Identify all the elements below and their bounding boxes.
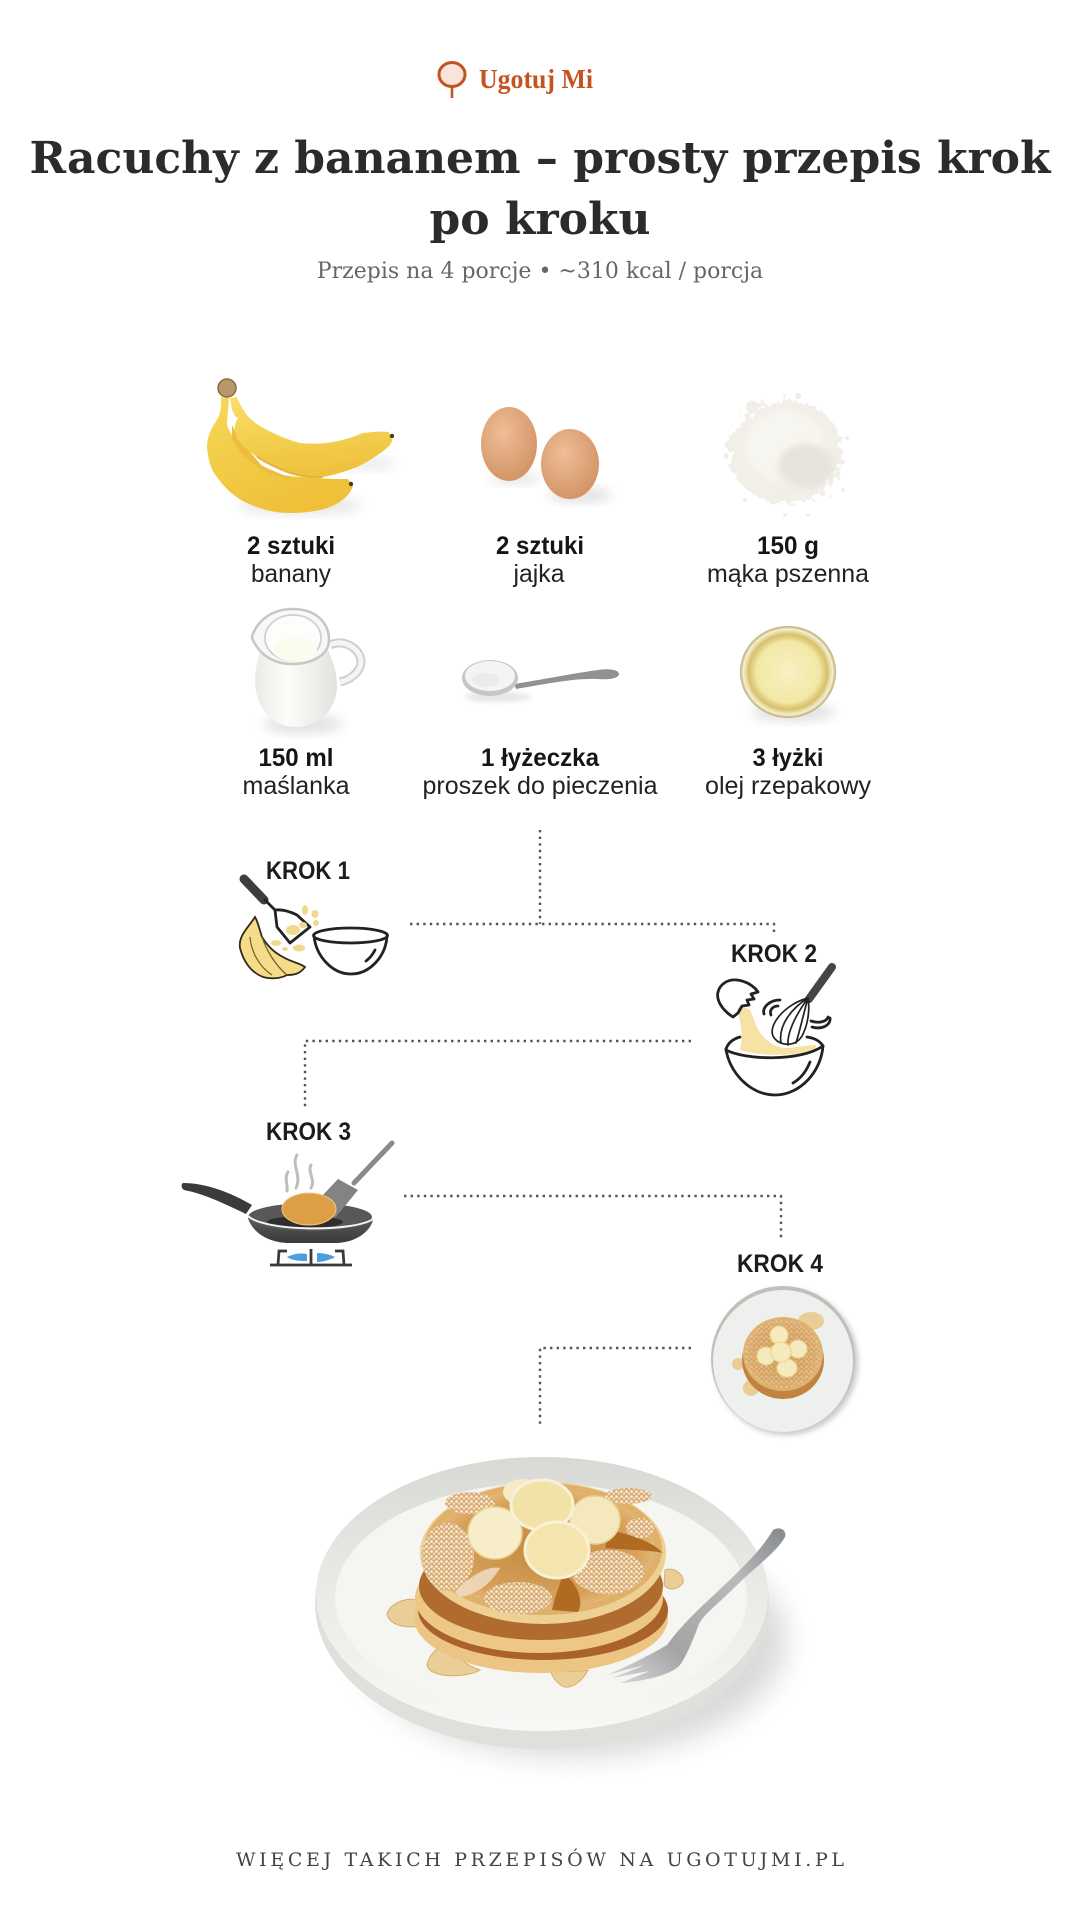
label: flour bbox=[707, 532, 869, 588]
heading: step 1: KROK 1 bbox=[266, 857, 350, 885]
label: eggs bbox=[496, 532, 584, 588]
icon: bowl of oil bbox=[740, 626, 836, 721]
label: rapeseed oil bbox=[705, 744, 871, 800]
heading: step 2: KROK 2 bbox=[731, 940, 817, 968]
icon: eggs bbox=[481, 407, 612, 502]
subtitle: Przepis na 4 porcje • ~310 kcal / porcja bbox=[317, 259, 763, 284]
icon: small plated pancakes bbox=[711, 1286, 858, 1435]
footer: WIĘCEJ TAKICH PRZEPISÓW NA UGOTUJMI.PL bbox=[236, 1848, 844, 1871]
title: po kroku bbox=[430, 194, 650, 245]
plate shadow bbox=[357, 1522, 787, 1758]
label: flour: mąka pszenna bbox=[707, 560, 869, 588]
label: baking powder: proszek do pieczenia bbox=[422, 772, 658, 800]
title: Racuchy z bananem – prosty przepis krok bbox=[29, 133, 1052, 184]
icon: spoon with baking powder bbox=[462, 660, 619, 702]
label: buttermilk: 150 ml bbox=[258, 744, 334, 772]
icon: empty bowl bbox=[314, 928, 388, 974]
label: eggs: jajka bbox=[513, 560, 565, 588]
label: eggs: 2 sztuki bbox=[496, 532, 584, 560]
label: baking powder: 1 łyżeczka bbox=[481, 744, 600, 772]
icon: egg poured in bowl with whisk bbox=[718, 967, 832, 1095]
arrow: step 4 to final dish bbox=[540, 1348, 691, 1425]
label: bananas: 2 sztuki bbox=[247, 532, 335, 560]
label: buttermilk: maślanka bbox=[242, 772, 350, 800]
icon: flour bbox=[724, 393, 849, 517]
fork bbox=[607, 1528, 785, 1683]
label: baking powder bbox=[422, 744, 658, 800]
label: bananas: banany bbox=[251, 560, 331, 588]
label: bananas bbox=[247, 532, 335, 588]
panel: ingredients bbox=[207, 379, 871, 800]
syrup pools bbox=[387, 1569, 683, 1687]
label: buttermilk bbox=[242, 744, 350, 800]
plate bbox=[315, 1457, 769, 1749]
step 3 bbox=[182, 1118, 392, 1265]
step 2 bbox=[718, 940, 832, 1095]
pancake stack bbox=[414, 1482, 668, 1673]
step 4 bbox=[711, 1250, 858, 1435]
arrow: step 2 to step 3 bbox=[305, 1041, 691, 1107]
arrow: step 3 to step 4 bbox=[404, 1196, 781, 1240]
logo bbox=[439, 62, 593, 98]
step 1 bbox=[240, 857, 388, 978]
final dish: banana pancakes on plate bbox=[315, 1457, 787, 1758]
label: rapeseed oil: 3 łyżki bbox=[752, 744, 824, 772]
heading: step 3: KROK 3 bbox=[266, 1118, 351, 1146]
icon: banana and masher bbox=[240, 879, 319, 978]
arrow: ingredients to steps 1 and 2 bbox=[410, 830, 774, 933]
label: flour: 150 g bbox=[757, 532, 819, 560]
banana slices bbox=[468, 1479, 620, 1578]
icon: bananas bbox=[207, 379, 395, 514]
label: rapeseed oil: olej rzepakowy bbox=[705, 772, 871, 800]
icon: milk jug bbox=[252, 609, 361, 733]
logo wordmark: Ugotuj Mi bbox=[479, 64, 593, 94]
icon: frying pan with pancake on burner bbox=[182, 1143, 392, 1265]
heading: step 4: KROK 4 bbox=[737, 1250, 823, 1278]
icon: logo spoon bbox=[439, 62, 465, 98]
